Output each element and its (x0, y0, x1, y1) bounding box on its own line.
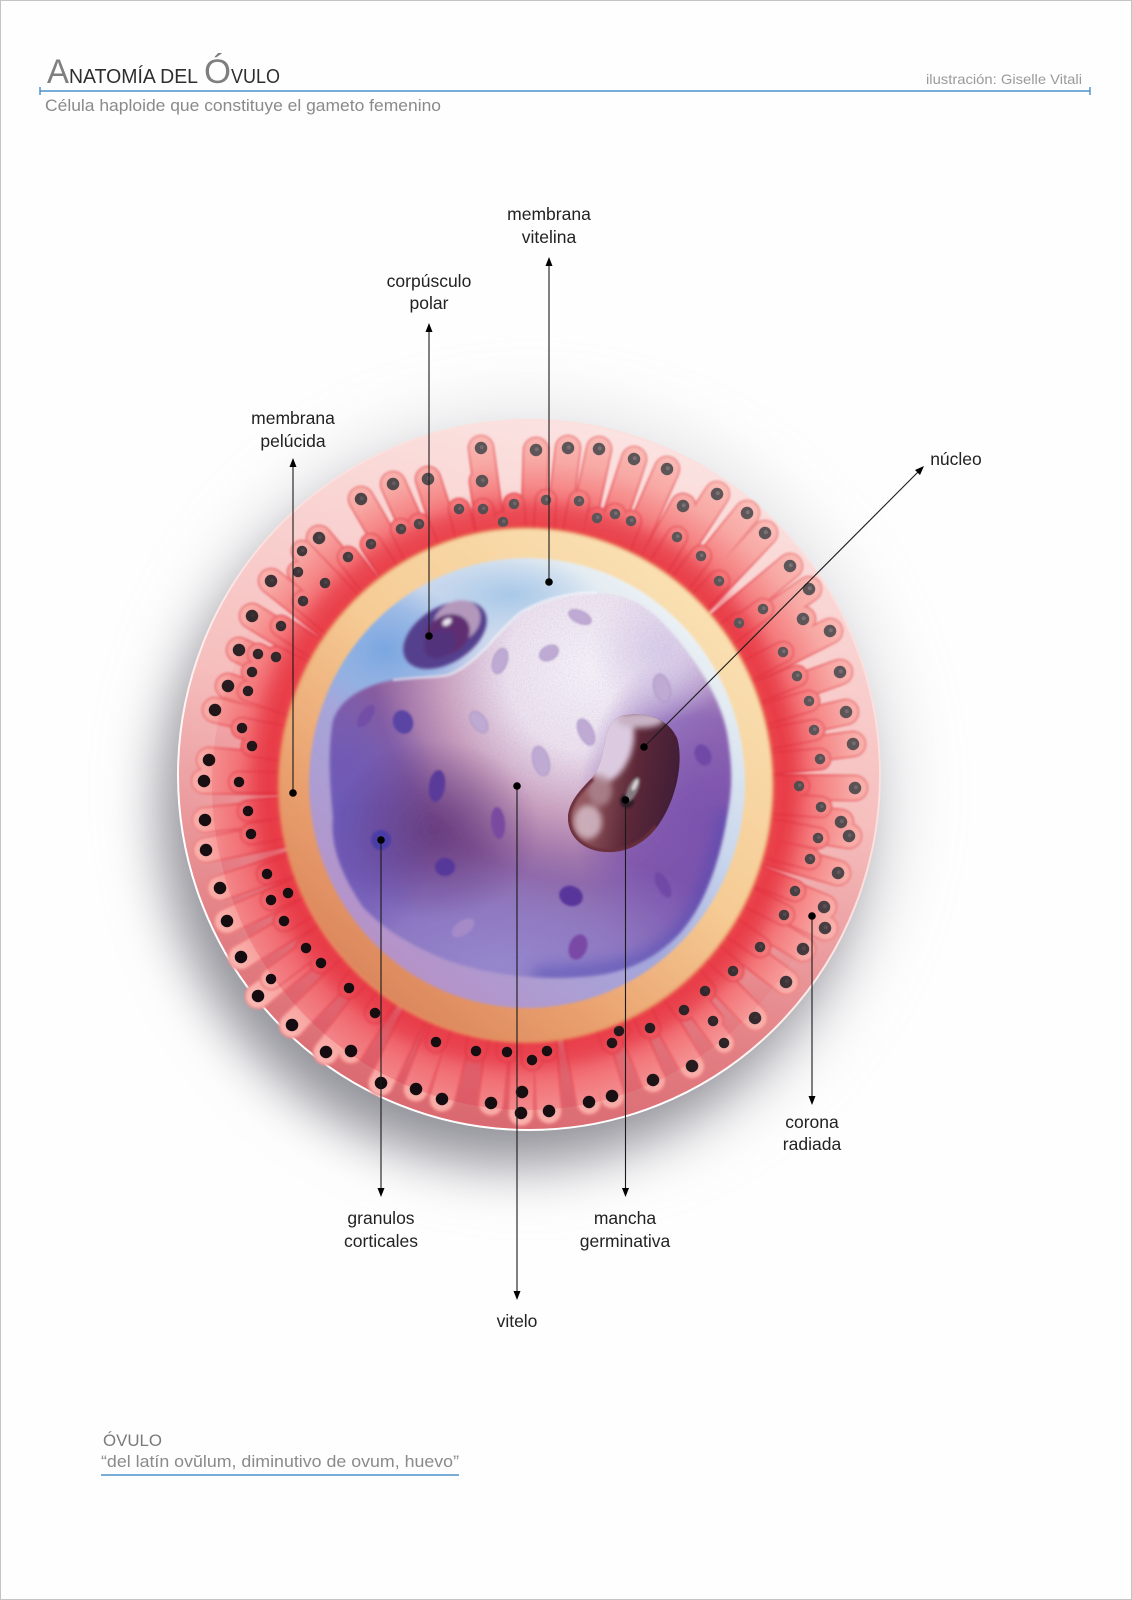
callout: granulos corticales: corticales (344, 1231, 418, 1251)
callout: vitelo (497, 782, 537, 1331)
callout: mancha germinativa: mancha (594, 1208, 656, 1228)
cytoplasm grain (405, 593, 722, 855)
zona pellucida ring (279, 528, 773, 1042)
germinal spot (620, 775, 643, 808)
callout: corpúsculo polar: corpúsculo (387, 271, 471, 291)
cytoplasm (vitellus) (328, 594, 734, 980)
callout: membrana pelúcida: membrana (251, 408, 335, 428)
cytoplasm rim highlight (393, 593, 597, 680)
polar body (391, 587, 499, 683)
callout: núcleo: núcleo (930, 449, 982, 469)
callout: membrana pelúcida (251, 408, 335, 797)
credit: ilustración: Giselle Vitali (926, 71, 1082, 87)
title: A (47, 53, 69, 91)
perivitelline space (300, 555, 745, 1008)
callout: mancha germinativa: germinativa (580, 1231, 670, 1251)
callout: granulos corticales: granulos (347, 1208, 415, 1228)
callout: corona radiada: radiada (783, 1134, 841, 1154)
callout: membrana pelúcida: pelúcida (260, 431, 326, 451)
callout: corpúsculo polar (387, 271, 471, 640)
callout: corona radiada: corona (785, 1112, 839, 1132)
callout: núcleo (640, 449, 982, 751)
callout: mancha germinativa (580, 796, 670, 1251)
illustration: ovum (144, 395, 914, 1185)
callout: corpúsculo polar: polar (410, 293, 449, 313)
title: NATOMÍA DEL (69, 65, 198, 88)
header rule (40, 87, 1090, 95)
subtitle: Célula haploide que constituye el gameto femenino (45, 97, 441, 115)
callout: vitelo: vitelo (497, 1311, 537, 1331)
title: VULO (231, 66, 280, 88)
callout: membrana vitelina: vitelina (522, 227, 576, 247)
footnote: etymology: ÓVULO (103, 1431, 162, 1450)
cortical granules (354, 606, 715, 962)
callout: membrana vitelina (507, 204, 591, 586)
title: Ó (204, 53, 231, 91)
callout: granulos corticales (344, 836, 418, 1251)
footnote: etymology (101, 1431, 459, 1475)
footnote: etymology: “del latín ovŭlum, diminutivo de ovum, huevo” (101, 1452, 459, 1471)
drop shadow (144, 395, 914, 1185)
corona radiata (178, 420, 880, 1130)
title (47, 53, 280, 91)
nucleus (568, 714, 680, 852)
callout: corona radiada (783, 912, 841, 1154)
callout: membrana vitelina: membrana (507, 204, 591, 224)
